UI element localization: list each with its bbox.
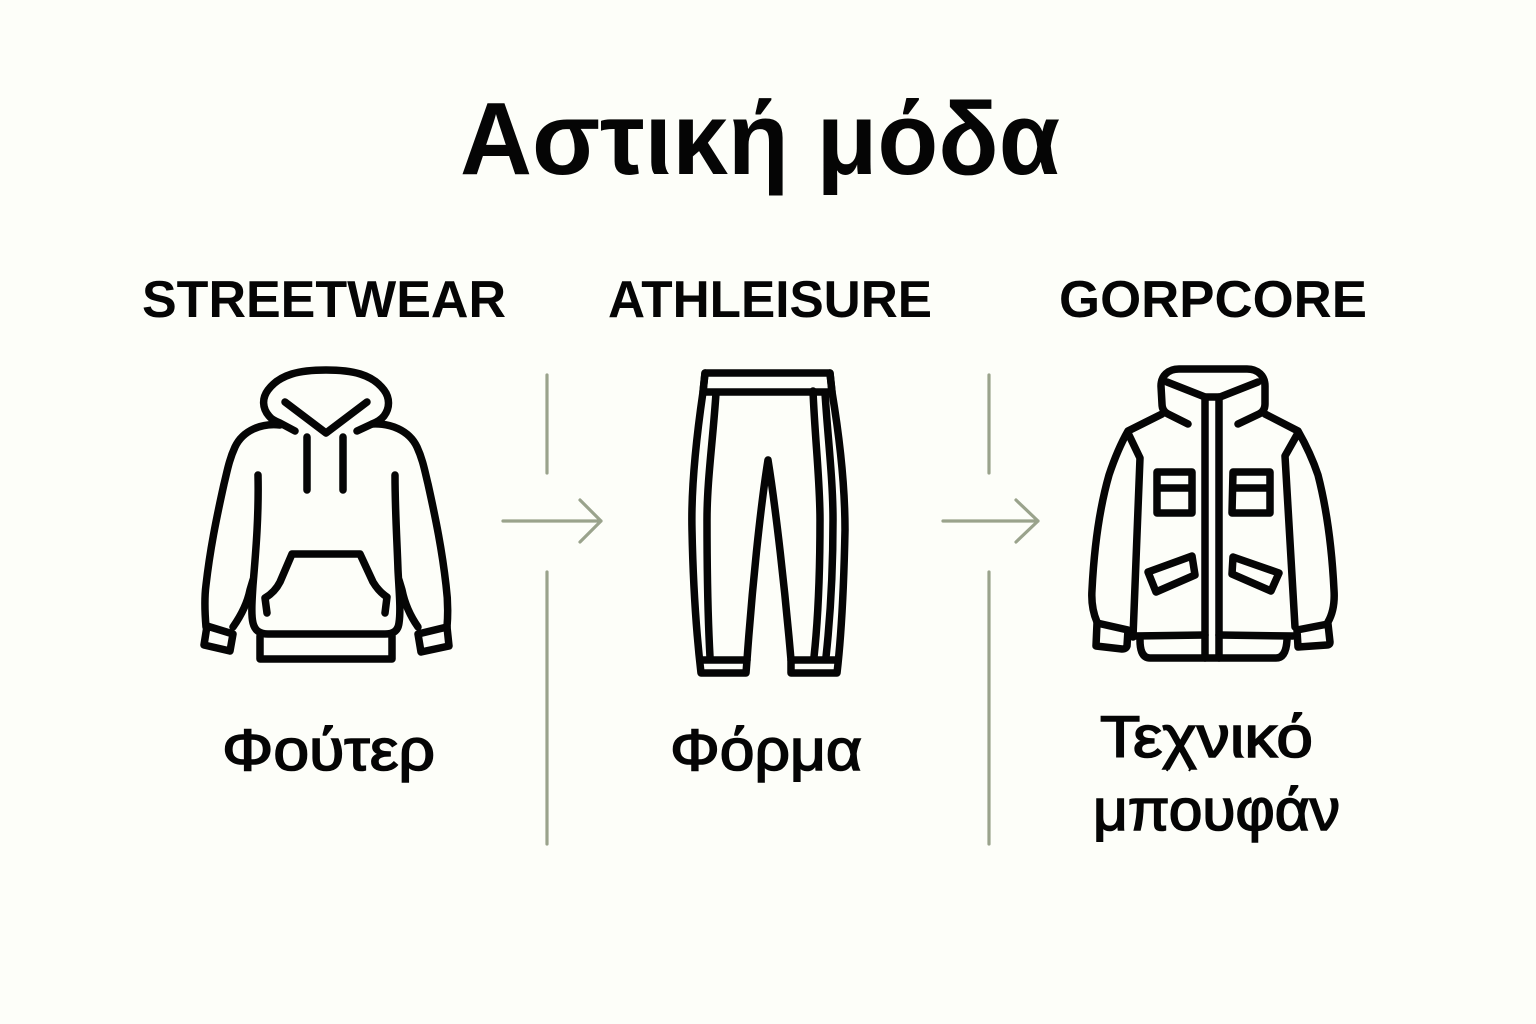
label: technical jacket xyxy=(1093,705,1340,843)
icon: technical jacket xyxy=(1092,369,1334,658)
heading: gorpcore: GORPCORE xyxy=(1059,271,1367,329)
title: Αστική μόδα xyxy=(460,81,1060,196)
arrow 1 xyxy=(503,500,601,542)
label: hoodie: Φούτερ xyxy=(222,718,435,783)
heading: streetwear: STREETWEAR xyxy=(142,271,506,329)
panel: streetwear xyxy=(142,271,506,783)
label: track pants: Φόρμα xyxy=(670,718,862,783)
panel: gorpcore xyxy=(1059,271,1367,843)
divider 2 top xyxy=(987,375,991,473)
label: technical jacket: Τεχνικό xyxy=(1100,705,1313,770)
divider 2 bottom xyxy=(987,572,991,844)
panel: athleisure xyxy=(608,271,932,783)
divider 1 top xyxy=(545,375,549,473)
icon: track pants xyxy=(692,373,845,673)
icon: hoodie xyxy=(204,370,449,659)
divider 1 bottom xyxy=(545,572,549,844)
label: technical jacket: μπουφάν xyxy=(1093,778,1340,843)
heading: athleisure: ATHLEISURE xyxy=(608,271,932,329)
arrow 2 xyxy=(943,500,1038,542)
